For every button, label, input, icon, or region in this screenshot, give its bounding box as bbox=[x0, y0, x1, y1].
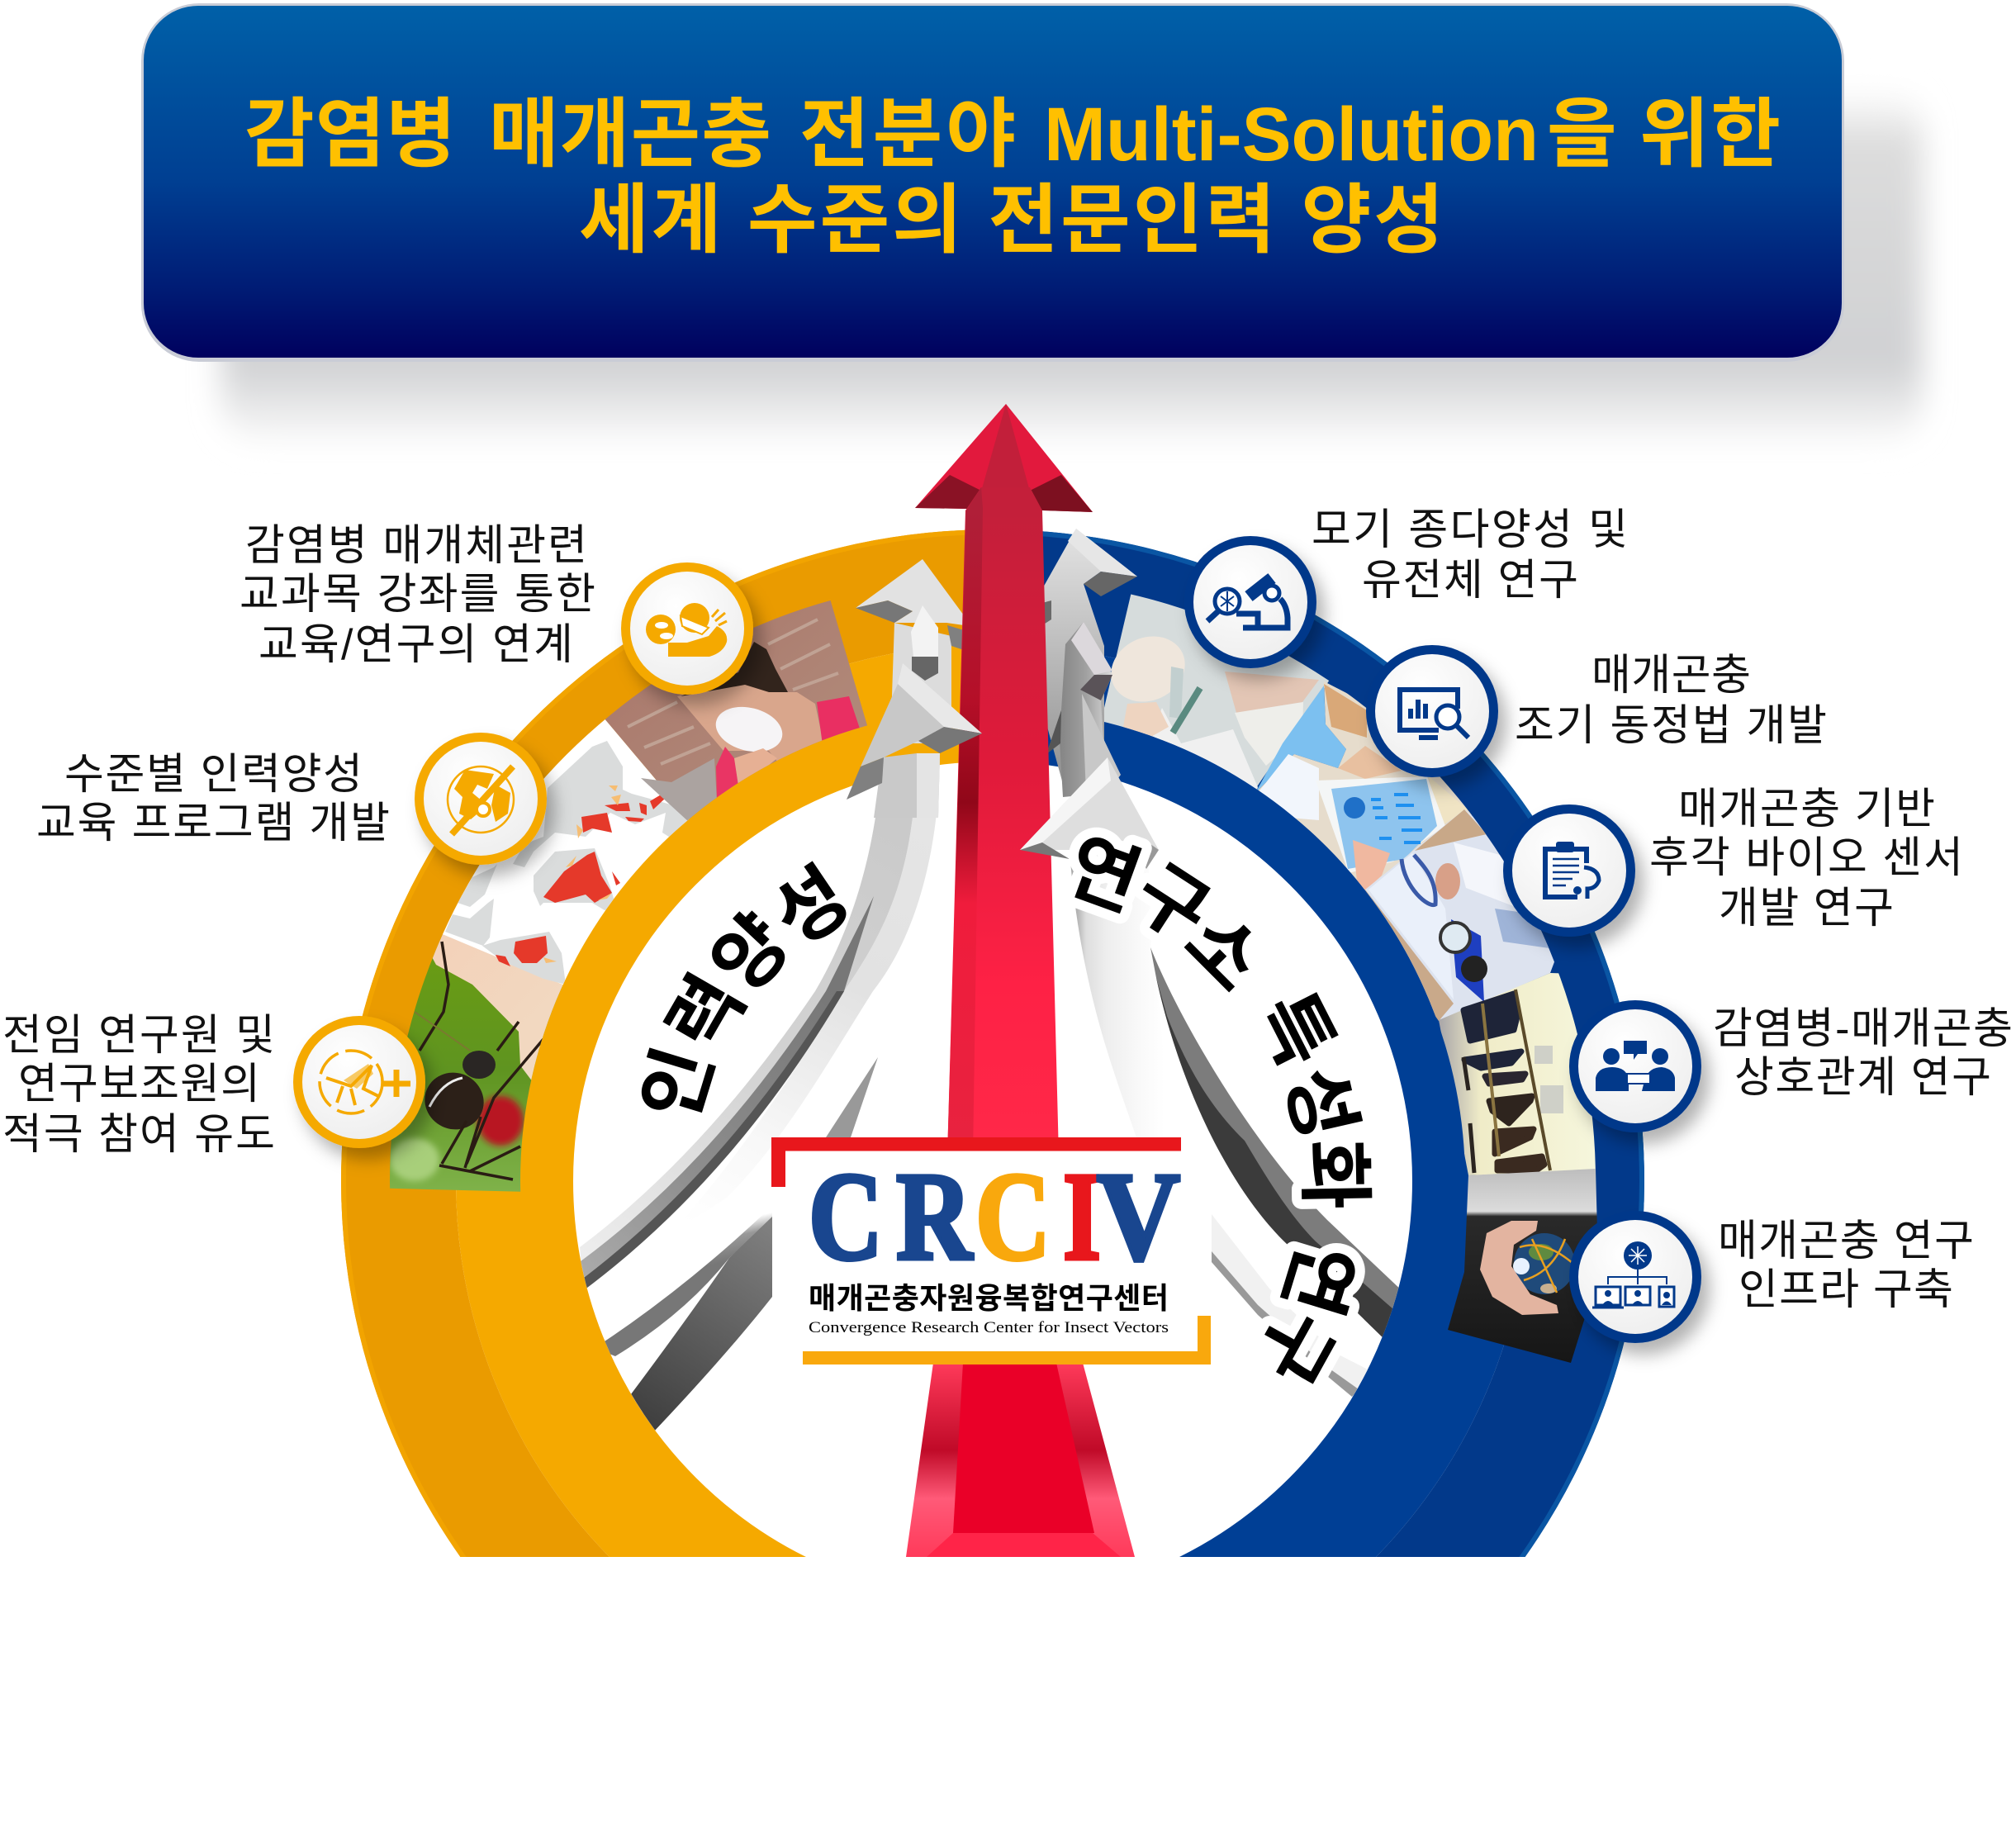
icon: monitor with magnifier bbox=[1366, 645, 1498, 777]
logo Korean name: 매개곤충자원융복합연구센터 bbox=[809, 1281, 1169, 1315]
icon: research network bbox=[1569, 1211, 1701, 1343]
icon: person coughing with virus bbox=[621, 562, 753, 695]
label: staff participation bbox=[2, 1012, 275, 1159]
label: course linkage: 교과목 강좌를 통한 bbox=[240, 571, 595, 619]
title: 매개곤충 bbox=[489, 93, 771, 177]
title: 을 bbox=[1547, 93, 1617, 177]
silver band: left main sweep bbox=[580, 753, 940, 1290]
silver arrow: front left bbox=[847, 663, 982, 818]
label: olfactory biosensor: 매개곤충 기반 bbox=[1678, 785, 1935, 833]
label: mosquito diversity bbox=[1312, 506, 1628, 605]
silver band: right white sweep bbox=[1070, 856, 1133, 1125]
icon: microscope and magnifier bbox=[1184, 536, 1316, 668]
arc heading: 연구소 특성화 연구: 구 bbox=[1120, 849, 1224, 958]
photo: silhouettes of people bbox=[1439, 973, 1606, 1175]
header shadow bbox=[221, 91, 1923, 441]
silver arrow: back right bbox=[1042, 529, 1137, 793]
blue ring bbox=[1042, 531, 1644, 1557]
silver arrow: back left bbox=[856, 559, 964, 743]
icon: mosquito plus bbox=[293, 1016, 425, 1148]
label: course linkage: 감염병 매개체관련 bbox=[245, 522, 587, 570]
logo English name: Convergence Research Center for Insect Vectors bbox=[809, 1319, 1169, 1336]
photo: tablet chart bbox=[1255, 681, 1478, 900]
logo wordmark CRCIV: I bbox=[1063, 1147, 1101, 1287]
logo bracket orange bbox=[803, 1316, 1211, 1365]
label: course linkage bbox=[240, 522, 595, 669]
label: olfactory biosensor bbox=[1649, 785, 1963, 933]
logo wordmark CRCIV bbox=[809, 1147, 1180, 1287]
orange ring bbox=[341, 530, 965, 1557]
photo: medical instruments bbox=[1365, 809, 1565, 1021]
header banner bbox=[141, 3, 1844, 362]
label: interaction research bbox=[1713, 1005, 2013, 1102]
label: education programs bbox=[36, 751, 390, 847]
arc heading: 연구소 특성화 연구: 성 bbox=[1271, 1060, 1369, 1146]
photo: woman with mask bbox=[605, 600, 867, 821]
title: Multi-Solution bbox=[1044, 93, 1539, 177]
icon: clipboard with stethoscope bbox=[1503, 804, 1635, 937]
arc heading: 인력양성: 양 bbox=[696, 900, 806, 1009]
photo: mosquito bbox=[390, 933, 563, 1192]
label: staff participation: 적극 참여 유도 bbox=[2, 1111, 275, 1159]
title: 위한 bbox=[1639, 93, 1781, 177]
label: staff participation: 연구보조원의 bbox=[18, 1061, 260, 1108]
logo bracket red bbox=[771, 1137, 1181, 1187]
silver band: right lower sweep bbox=[1212, 1214, 1371, 1397]
label: olfactory biosensor: 후각 바이오 센서 bbox=[1649, 834, 1963, 882]
arc heading: 연구소 특성화 연구: 소 bbox=[1169, 899, 1278, 1007]
arc heading: 인력양성: 력 bbox=[653, 962, 761, 1065]
label: research infrastructure: 인프라 구축 bbox=[1739, 1266, 1953, 1314]
logo bbox=[771, 1137, 1211, 1365]
label: staff participation: 전임 연구원 및 bbox=[2, 1012, 275, 1060]
label: education programs: 교육 프로그램 개발 bbox=[36, 800, 390, 847]
silver band: left thick sweep bbox=[624, 1057, 878, 1433]
icon: globe with orbit bbox=[415, 733, 547, 865]
label: education programs: 수준별 인력양성 bbox=[64, 751, 363, 799]
label: mosquito diversity: 모기 종다양성 및 bbox=[1312, 506, 1628, 554]
logo wordmark CRCIV: V bbox=[1097, 1147, 1180, 1287]
photo: scientist bbox=[1104, 595, 1346, 790]
arc heading: 인력양성 bbox=[628, 853, 864, 1130]
label: early identification: 매개곤충 bbox=[1591, 652, 1751, 700]
silver band: left thin sweep bbox=[605, 1214, 772, 1356]
label: research infrastructure: 매개곤충 연구 bbox=[1718, 1217, 1974, 1265]
label: olfactory biosensor: 개발 연구 bbox=[1719, 885, 1894, 933]
title: 세계 수준의 전문인력 양성 bbox=[579, 178, 1444, 263]
arc heading: 인력양성: 인 bbox=[628, 1038, 728, 1130]
label: early identification bbox=[1515, 652, 1827, 750]
icon: two people talking bbox=[1569, 1000, 1701, 1132]
photo: hand holding globe bbox=[1448, 1169, 1597, 1363]
label: course linkage: 교육/연구의 연계 bbox=[259, 621, 573, 669]
arc heading: 연구소 특성화 연구 bbox=[1056, 823, 1377, 1398]
silver arrow: second right bbox=[1046, 622, 1121, 797]
title bbox=[244, 93, 1781, 263]
title: 전분야 bbox=[799, 93, 1016, 177]
label: mosquito diversity: 유전체 연구 bbox=[1362, 557, 1578, 605]
arc heading: 연구소 특성화 연구: 특 bbox=[1241, 980, 1349, 1080]
label: research infrastructure bbox=[1718, 1217, 1974, 1314]
logo wordmark CRCIV: C bbox=[975, 1147, 1051, 1287]
red arrow bbox=[906, 404, 1135, 1557]
arc heading: 인력양성: 성 bbox=[759, 853, 864, 962]
silver band: right dark sweep bbox=[1150, 947, 1404, 1342]
silver arrow: front right bbox=[1020, 757, 1159, 869]
arc heading: 연구소 특성화 연구: 화 bbox=[1291, 1139, 1377, 1210]
arc heading: 연구소 특성화 연구: 연 bbox=[1056, 823, 1150, 926]
arc heading: 연구소 특성화 연구: 연 bbox=[1268, 1233, 1369, 1325]
label: interaction research: 감염병-매개곤충 bbox=[1713, 1005, 2013, 1053]
label: interaction research: 상호관계 연구 bbox=[1734, 1054, 1991, 1102]
logo wordmark CRCIV: C bbox=[809, 1147, 883, 1287]
label: early identification: 조기 동정법 개발 bbox=[1515, 702, 1827, 750]
logo background bbox=[772, 1137, 1211, 1365]
photo: world map bbox=[443, 719, 689, 985]
arc heading: 연구소 특성화 연구: 구 bbox=[1241, 1295, 1349, 1398]
logo wordmark CRCIV: R bbox=[896, 1147, 973, 1287]
title: 감염병 bbox=[244, 93, 456, 177]
